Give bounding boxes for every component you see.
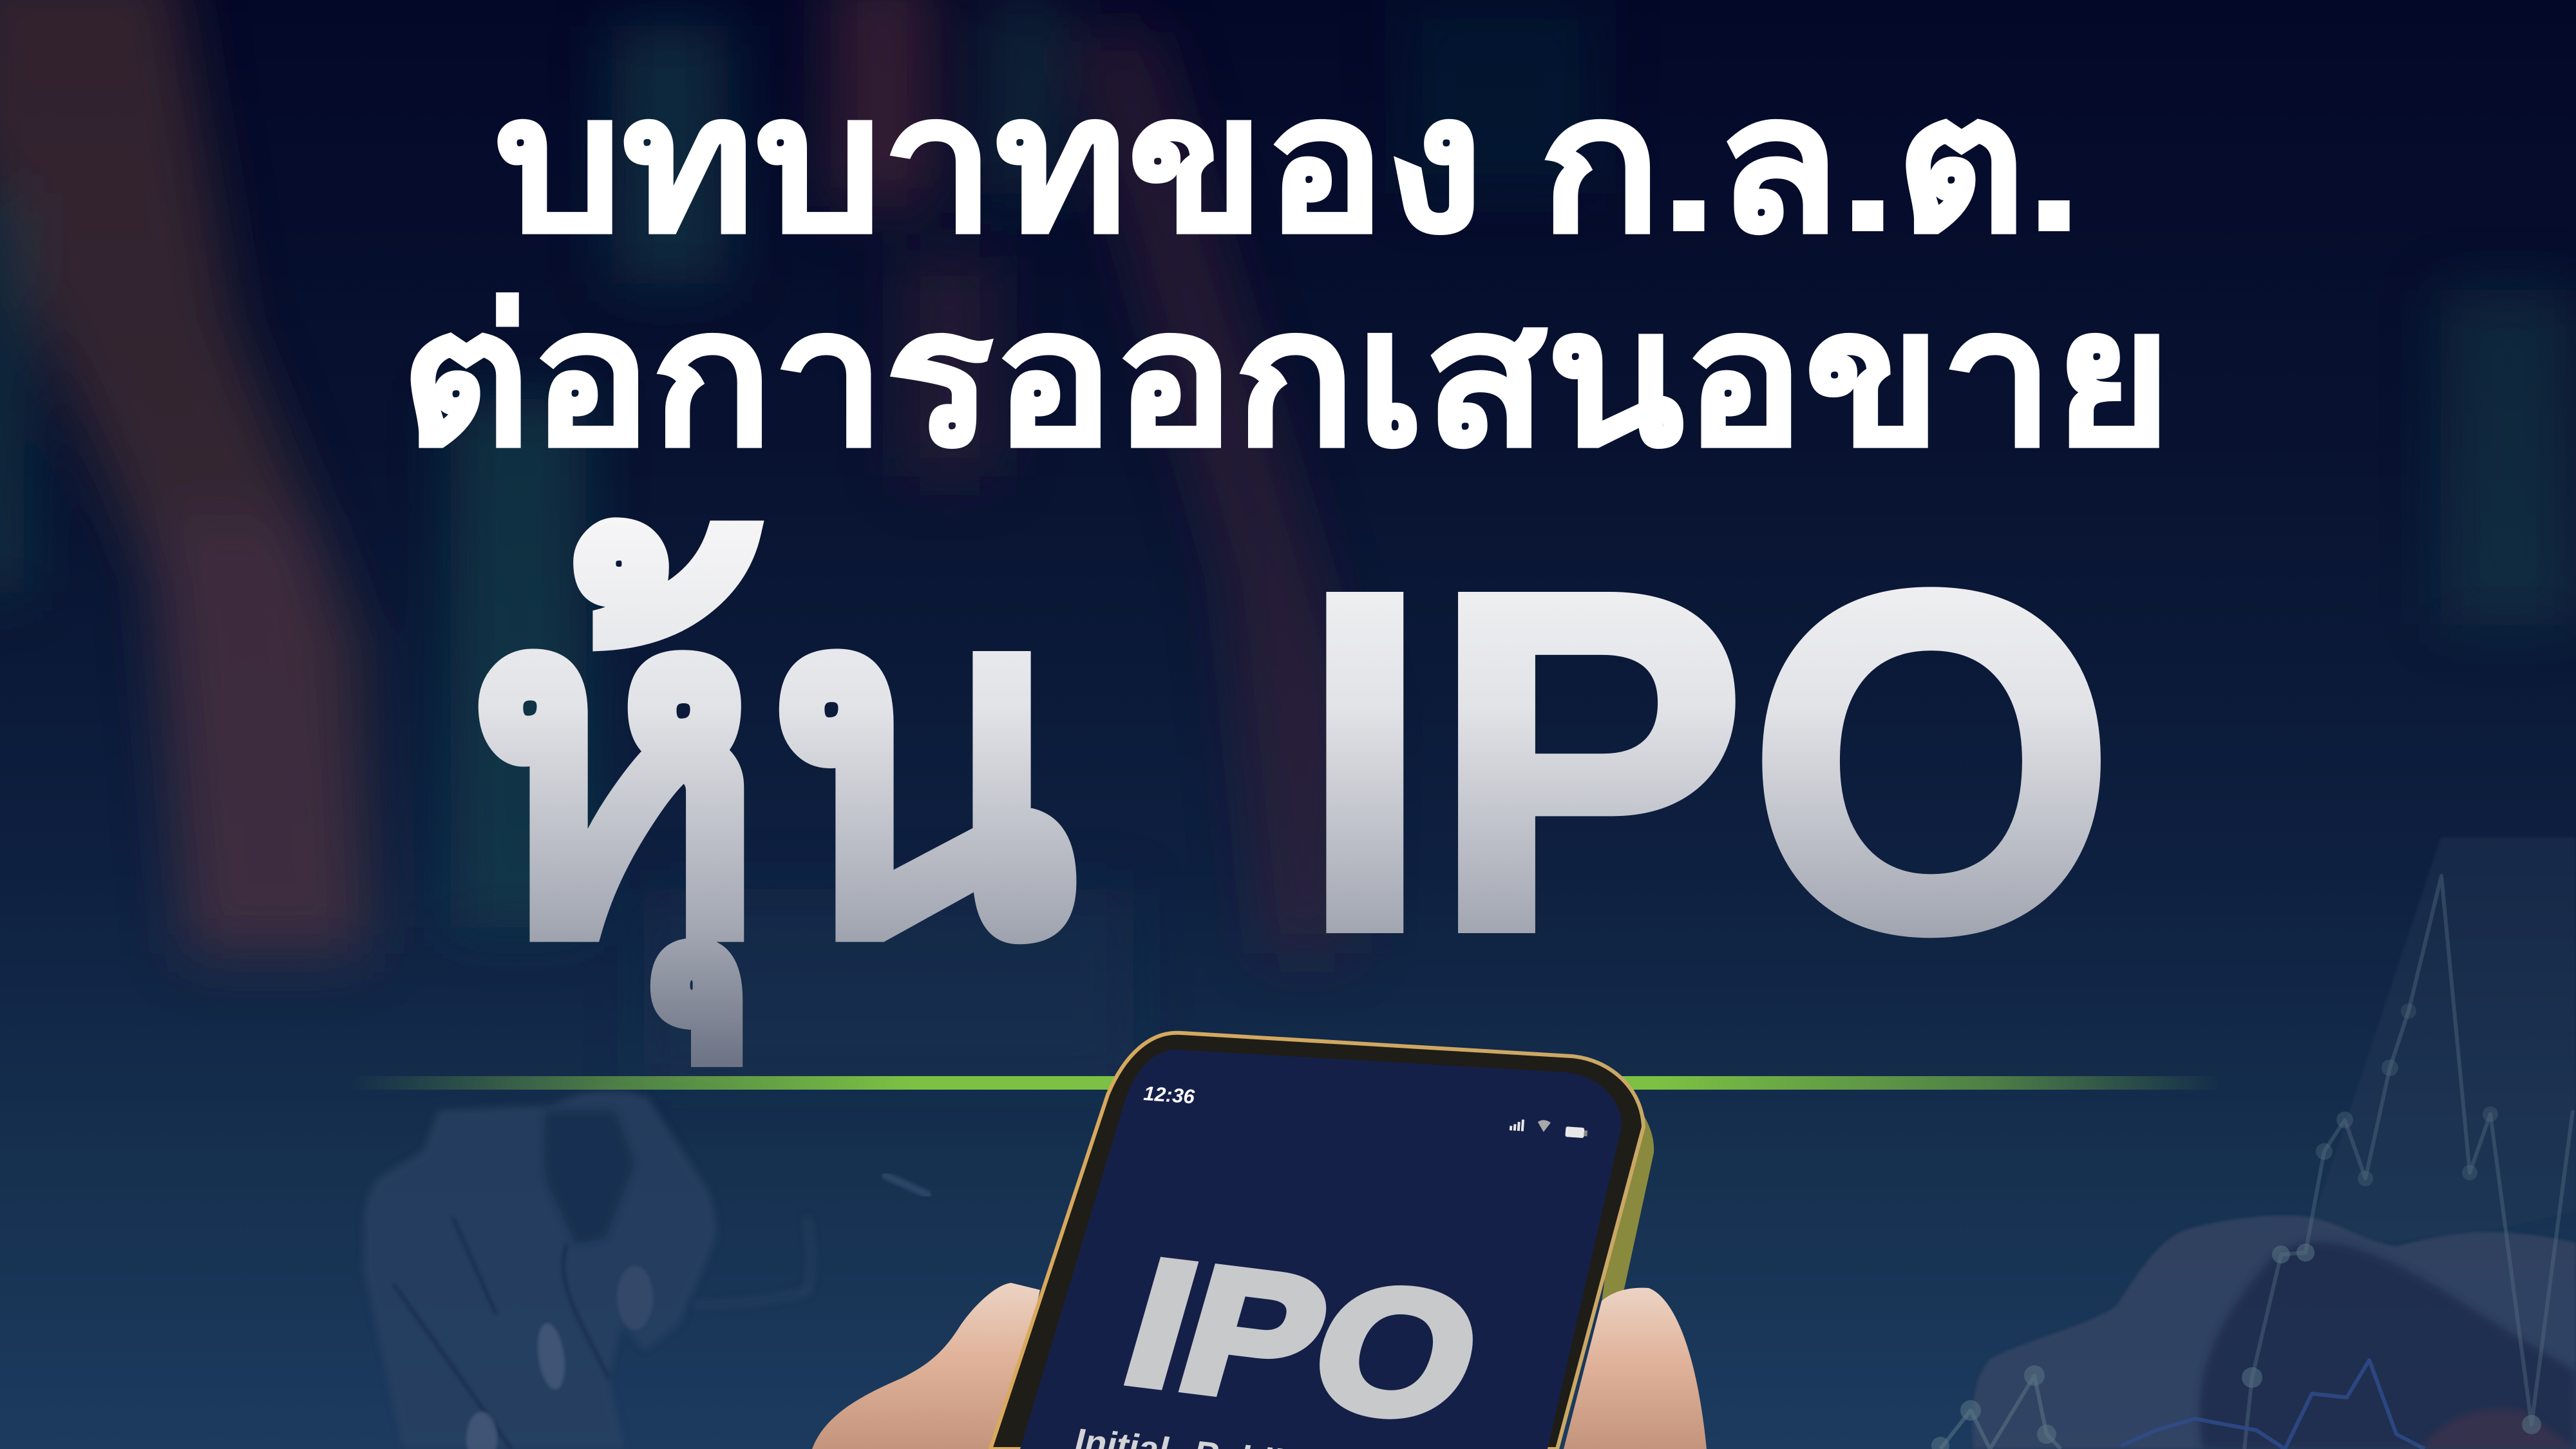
- green divider line: [348, 1076, 2222, 1090]
- title line 2: ต่อการออกเสนอขาย: [401, 272, 2172, 484]
- phone body: [990, 1033, 1643, 1449]
- headline: หุ้น: หุ้น: [468, 496, 1078, 1065]
- phone IPO label: IPO: [1106, 1223, 1501, 1449]
- background: ghost line chart: [1931, 876, 2573, 1449]
- phone screen: [1020, 1050, 1622, 1449]
- title line 1: บทบาทของ ก.ล.ต.: [495, 58, 2082, 270]
- status icons: [1510, 1118, 1588, 1139]
- headline: IPO: IPO: [1299, 491, 2116, 1031]
- left finger behind phone: [812, 1283, 1040, 1449]
- right thumb in front of phone: [1564, 1288, 1707, 1449]
- smartphone: [990, 1033, 1654, 1449]
- background: ghost left hand: [364, 1091, 927, 1449]
- background: blurred candlestick chart: [0, 0, 2576, 1082]
- background: ghost right hand and paper: [1973, 837, 2576, 1449]
- phone clock: 12:36: [1143, 1082, 1196, 1108]
- phone side edge: [1591, 1095, 1654, 1385]
